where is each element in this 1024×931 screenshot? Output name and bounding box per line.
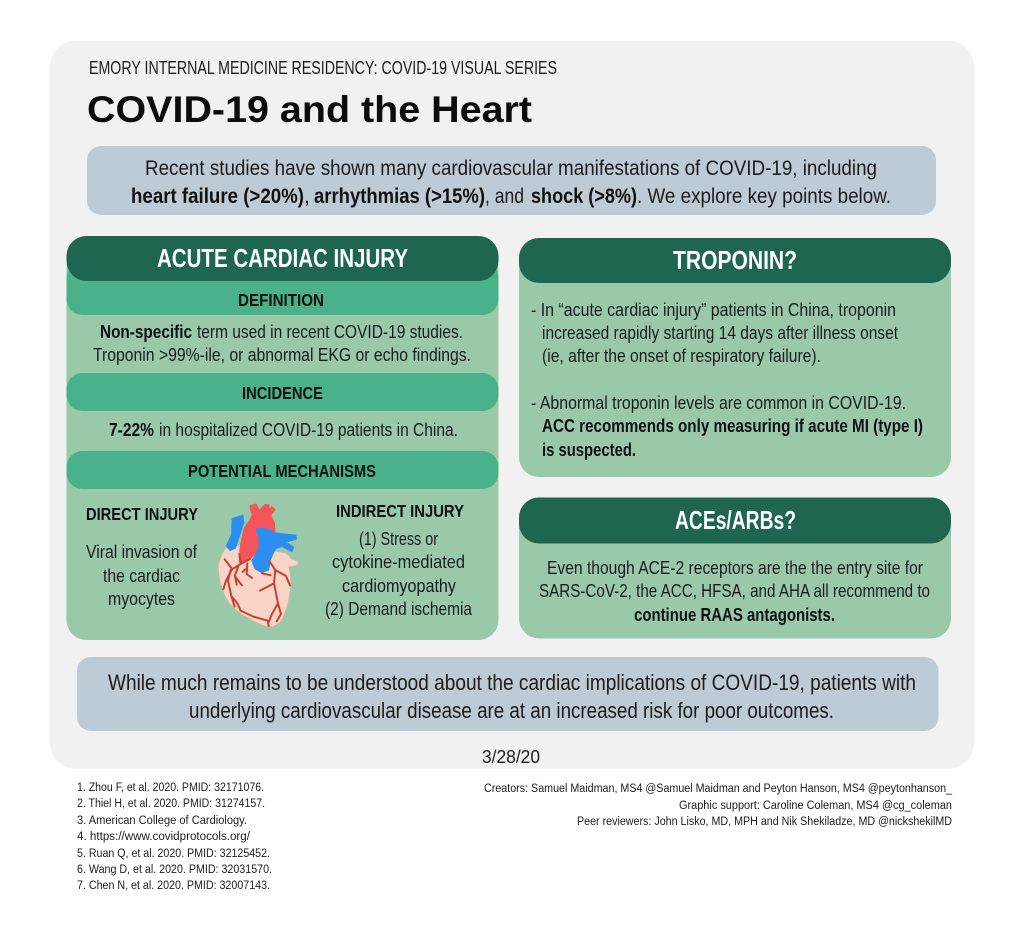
- indirect injury column: [325, 501, 473, 619]
- subheading: incidence: INCIDENCE: [242, 383, 323, 403]
- background panel: [50, 41, 974, 768]
- panel heading: troponin: TROPONIN?: [673, 245, 797, 275]
- definition text: Troponin >99%-ile, or abnormal EKG or echo findings.: [93, 345, 471, 365]
- subheading: incidence: [66, 373, 498, 411]
- indirect injury column: cytokine-mediated: [332, 552, 465, 572]
- troponin text: - In “acute cardiac injury” patients in China, troponin: [531, 300, 896, 320]
- troponin text: (ie, after the onset of respiratory failure).: [542, 346, 821, 366]
- credits: Graphic support: Caroline Coleman, MS4 @cg_coleman: [679, 800, 952, 812]
- aces and arbs text: SARS-CoV-2, the ACC, HFSA, and AHA all recommend to: [539, 581, 930, 601]
- definition text: term used in recent COVID-19 studies.: [197, 322, 463, 342]
- subheading: definition: [66, 262, 498, 315]
- direct injury column: DIRECT INJURY: [86, 504, 198, 524]
- date: 3/28/20: [482, 747, 540, 767]
- intro callout: heart failure (>20%): [131, 185, 304, 208]
- references: 1. Zhou F, et al. 2020. PMID: 32171076.: [77, 782, 264, 794]
- definition text: Non-specific: [100, 322, 192, 342]
- definition text: [93, 322, 471, 365]
- intro callout: , and: [485, 185, 524, 208]
- credits: Creators: Samuel Maidman, MS4 @Samuel Maidman and Peyton Hanson, MS4 @peytonhanson_: [484, 783, 953, 795]
- panel: aces and arbs: [519, 498, 951, 638]
- direct injury column: [86, 504, 198, 609]
- intro callout: ,: [304, 185, 310, 208]
- references: [77, 782, 272, 892]
- indirect injury column: (2) Demand ischemia: [325, 599, 473, 619]
- panel: acute cardiac injury: [66, 236, 498, 640]
- subheading: potential mechanisms: POTENTIAL MECHANISMS: [188, 461, 376, 481]
- subheading: potential mechanisms: [66, 451, 498, 489]
- series label: EMORY INTERNAL MEDICINE RESIDENCY: COVID-19 VISUAL SERIES: [89, 58, 557, 78]
- conclusion callout: [77, 657, 938, 731]
- conclusion callout: While much remains to be understood about the cardiac implications of COVID-19, patients with: [108, 670, 916, 695]
- title: COVID-19 and the Heart: [87, 89, 532, 130]
- aces and arbs text: continue RAAS antagonists.: [634, 605, 835, 625]
- troponin text: - Abnormal troponin levels are common in COVID-19.: [531, 393, 906, 413]
- subheading: definition: DEFINITION: [238, 290, 324, 310]
- intro callout: [87, 146, 936, 215]
- intro callout: shock (>8%): [531, 185, 637, 208]
- incidence text: in hospitalized COVID-19 patients in China.: [159, 420, 458, 440]
- troponin text: is suspected.: [542, 440, 636, 460]
- icon: anatomical heart: [218, 504, 299, 627]
- references: 4. https://www.covidprotocols.org/: [77, 831, 251, 843]
- direct injury column: the cardiac: [103, 566, 180, 586]
- aces and arbs text: [539, 558, 930, 625]
- panel heading: troponin: [519, 238, 951, 283]
- aces and arbs text: Even though ACE-2 receptors are the the entry site for: [547, 558, 923, 578]
- references: 5. Ruan Q, et al. 2020. PMID: 32125452.: [77, 848, 270, 860]
- incidence text: 7-22%: [109, 420, 154, 440]
- panel heading: aces and arbs: ACEs/ARBs?: [675, 505, 796, 535]
- intro callout: Recent studies have shown many cardiovascular manifestations of COVID-19, including: [145, 157, 877, 180]
- references: 2. Thiel H, et al. 2020. PMID: 31274157.: [77, 798, 265, 810]
- indirect injury column: cardiomyopathy: [342, 576, 456, 596]
- intro callout: . We explore key points below.: [637, 185, 891, 208]
- references: 6. Wang D, et al. 2020. PMID: 32031570.: [77, 864, 272, 876]
- panel heading: acute cardiac injury: [66, 236, 498, 281]
- references: 3. American College of Cardiology.: [77, 815, 247, 827]
- panel: troponin: [519, 238, 951, 477]
- credits: [484, 783, 953, 828]
- direct injury column: Viral invasion of: [86, 542, 198, 562]
- troponin text: ACC recommends only measuring if acute MI (type I): [542, 416, 923, 436]
- troponin text: [531, 300, 923, 460]
- panel heading: aces and arbs: [519, 498, 951, 544]
- direct injury column: myocytes: [108, 589, 175, 609]
- intro callout: arrhythmias (>15%): [314, 185, 485, 208]
- conclusion callout: underlying cardiovascular disease are at an increased risk for poor outcomes.: [189, 698, 834, 723]
- panel heading: acute cardiac injury: ACUTE CARDIAC INJURY: [157, 243, 408, 273]
- references: 7. Chen N, et al. 2020. PMID: 32007143.: [77, 880, 270, 892]
- troponin text: increased rapidly starting 14 days after illness onset: [542, 323, 898, 343]
- indirect injury column: INDIRECT INJURY: [336, 501, 464, 521]
- credits: Peer reviewers: John Lisko, MD, MPH and Nik Shekiladze, MD @nickshekilMD: [577, 816, 952, 828]
- indirect injury column: (1) Stress or: [359, 529, 438, 549]
